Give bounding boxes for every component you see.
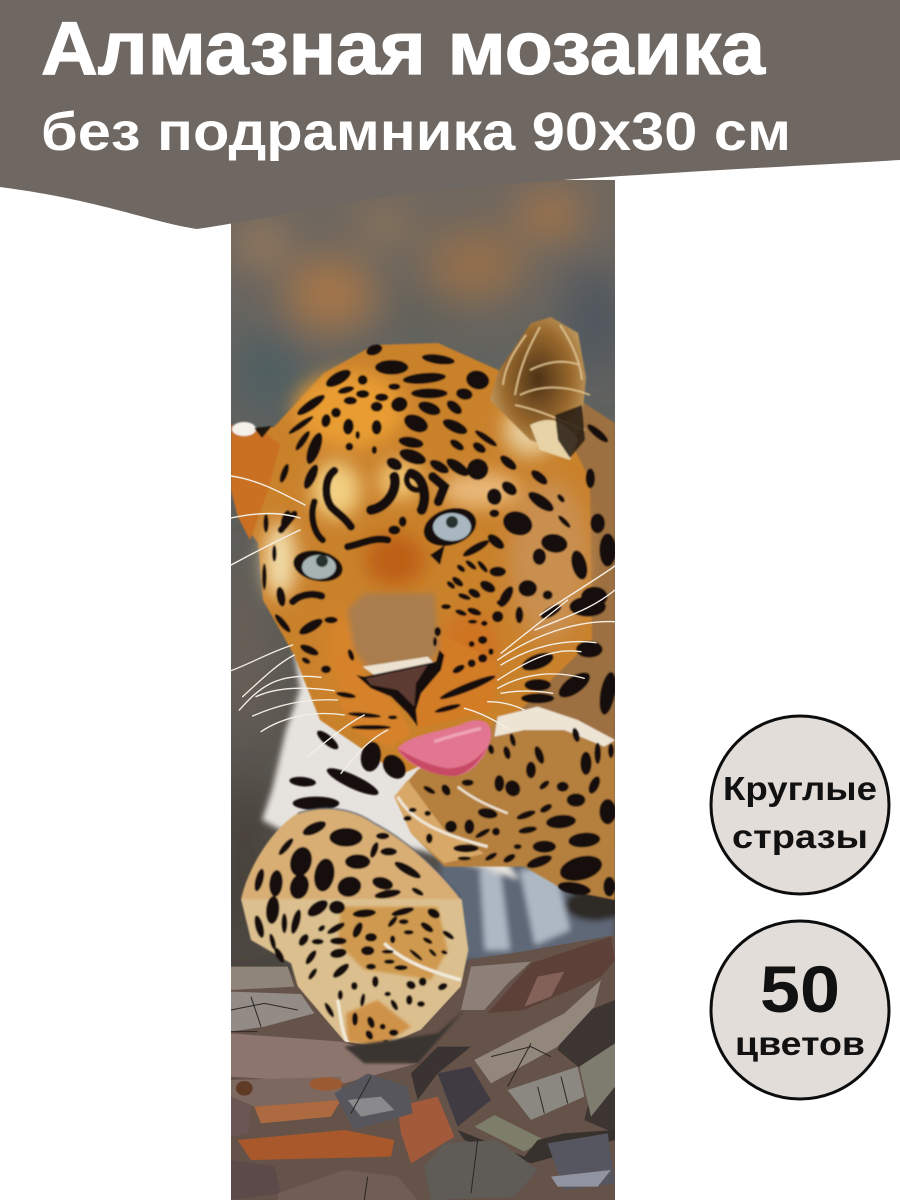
gray belly fur [440, 850, 625, 960]
badge: 50 colours: 50 [760, 952, 840, 1026]
log [231, 935, 615, 1200]
tongue [398, 720, 491, 776]
badge: 50 colours: цветов [735, 1025, 865, 1062]
white chest [262, 650, 520, 880]
left paw [241, 808, 468, 1047]
title: Алмазная мозаика [41, 6, 766, 90]
muzzle and nose [273, 593, 619, 747]
whiskers [231, 600, 615, 773]
subtitle: без подрамника 90х30 см [41, 102, 791, 162]
right ear [490, 317, 590, 460]
forehead rosette lines [281, 471, 444, 602]
right body [520, 402, 615, 740]
right paw [394, 707, 616, 900]
badge: round rhinestones: Круглые [723, 770, 877, 807]
badge: 50 colours [711, 921, 889, 1099]
head colour patches [264, 372, 590, 690]
head base [231, 343, 592, 775]
eyes [292, 507, 478, 582]
paw spots lower [252, 895, 455, 1043]
paw spots upper [252, 818, 425, 901]
blurred forest backdrop [231, 180, 615, 1045]
head markings [262, 342, 616, 609]
leopard picture [227, 180, 625, 1200]
left ear [231, 422, 280, 540]
cheek whiskers [231, 476, 615, 630]
badge: round rhinestones: стразы [732, 818, 868, 855]
chest markings [289, 728, 411, 810]
badge: round rhinestones [711, 716, 889, 894]
header band [0, 0, 900, 229]
leopard body group [231, 317, 619, 1047]
